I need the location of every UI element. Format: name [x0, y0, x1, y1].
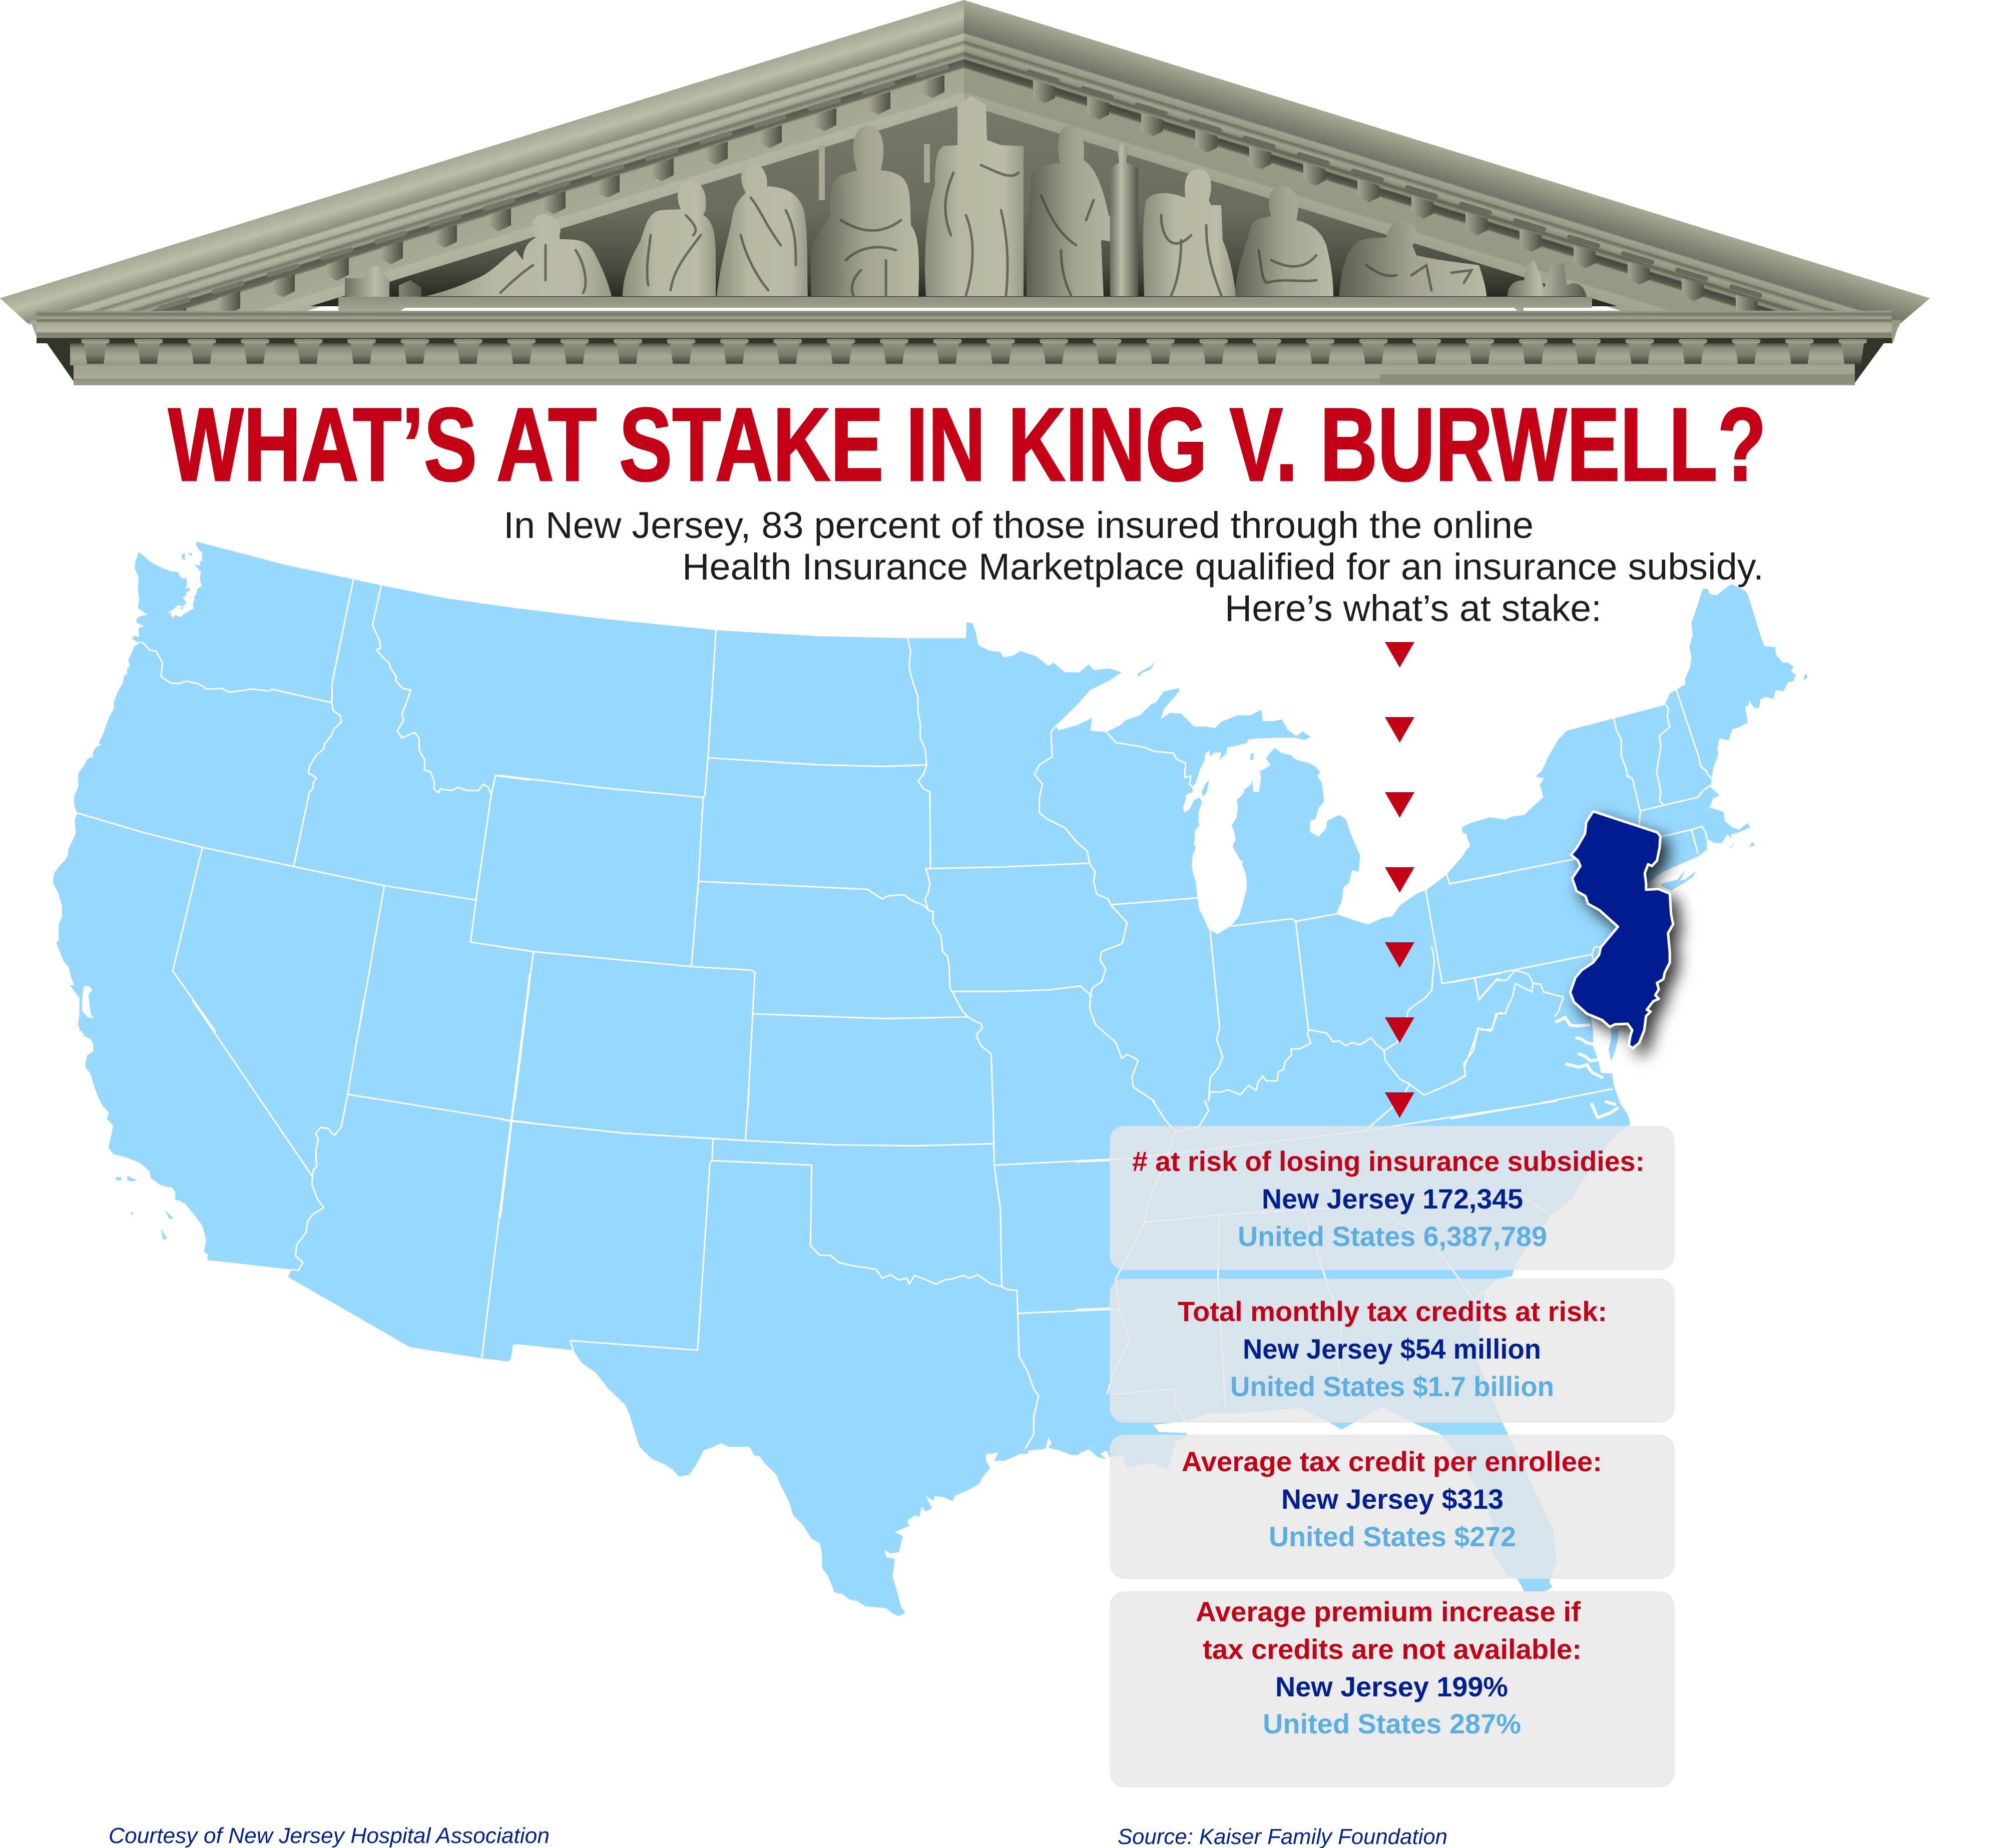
right small objects [1508, 260, 1587, 296]
spear shafts [819, 144, 930, 200]
land: great lakes [999, 651, 1502, 1101]
lower right fascia [1380, 365, 1855, 374]
panel: premium increase: New Jersey 199% [1275, 1671, 1508, 1702]
panel: at risk of losing subsidies: United States 6,387,789 [1238, 1220, 1547, 1252]
lower fascia [74, 365, 1855, 385]
panel: premium increase [1110, 1591, 1675, 1787]
panel: premium increase: Average premium increase if [1196, 1596, 1581, 1627]
raking cornice left [0, 0, 964, 324]
panel: at risk of losing subsidies: # at risk of losing insurance subsidies: [1132, 1145, 1645, 1177]
state borders [77, 579, 1711, 1448]
robed figure right [1143, 169, 1236, 296]
panel: average tax credit: Average tax credit per enrollee: [1182, 1446, 1602, 1477]
rake dentils left [160, 67, 946, 331]
lower right strip [1380, 374, 1855, 384]
map of the United States [53, 541, 1808, 1616]
land: southeast [1076, 1096, 1630, 1592]
lake michigan [1183, 738, 1276, 934]
bay rivers [1556, 1017, 1589, 1026]
panel: monthly tax credits: United States $1.7 billion [1230, 1371, 1554, 1402]
intro text: In New Jersey, 83 percent of those insured through the online [504, 504, 1534, 546]
panel: monthly tax credits: Total monthly tax credits at risk: [1178, 1296, 1607, 1327]
down arrows [1385, 642, 1414, 1118]
panel: average tax credit: United States $272 [1269, 1521, 1516, 1552]
land: new england [1451, 584, 1808, 901]
figure with spear [811, 125, 919, 296]
sculpture group [345, 96, 1587, 297]
land: northern plains [501, 606, 1001, 1101]
panel: monthly tax credits: New Jersey $54 million [1243, 1333, 1541, 1365]
land: texas and gulf [501, 1095, 1151, 1616]
pediment illustration [0, 0, 1930, 385]
base slab [338, 297, 1592, 311]
modillion pills [81, 339, 1867, 343]
reclining figure right [1339, 220, 1486, 296]
panel: at risk of losing subsidies: New Jersey 172,345 [1262, 1183, 1523, 1214]
intro text [504, 504, 1764, 629]
end cap left [30, 320, 46, 343]
intro text: Health Insurance Marketplace qualified for an insurance subsidy. [682, 546, 1764, 587]
left small objects [345, 265, 421, 297]
right standing figure [1027, 125, 1122, 296]
seated figure [623, 181, 716, 296]
side shadow right [1842, 340, 1886, 383]
side shadow left [45, 340, 85, 381]
dentil band [70, 343, 1855, 365]
central throned figure [925, 96, 1024, 296]
white slit under slab [400, 308, 1518, 311]
panel: monthly tax credits [1110, 1279, 1675, 1423]
land: southwest [78, 994, 531, 1362]
panel: premium increase: United States 287% [1263, 1708, 1521, 1739]
raking cornice right [964, 0, 1930, 324]
end cap right [1883, 320, 1902, 343]
horizontal cornice [37, 311, 1892, 343]
drapery folds [501, 165, 1471, 295]
seated figure right [1235, 186, 1333, 296]
panel: average tax credit [1110, 1435, 1675, 1579]
rake dentils right [1029, 72, 1760, 318]
reclining figure left [425, 214, 612, 296]
tympanum background [310, 104, 1618, 306]
san francisco bay [82, 986, 94, 1019]
land: northwest [53, 541, 531, 1031]
intro text: Here’s what’s at stake: [1225, 587, 1602, 629]
column with spear head [1110, 143, 1138, 296]
new jersey highlighted state [1570, 811, 1673, 1048]
land: mid-atlantic [1451, 871, 1697, 1127]
panel: at risk of losing subsidies [1110, 1126, 1675, 1270]
credit line: Courtesy of New Jersey Hospital Association [109, 1823, 550, 1848]
robed standing figure [717, 163, 808, 296]
dentils [84, 343, 1864, 365]
panel: average tax credit: New Jersey $313 [1281, 1483, 1504, 1515]
panel: premium increase: tax credits are not available: [1203, 1633, 1582, 1665]
